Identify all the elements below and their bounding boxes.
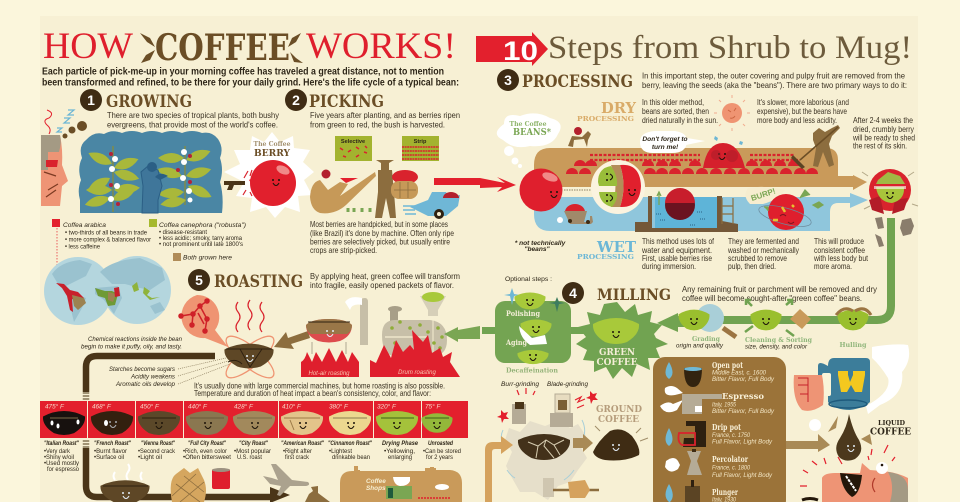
label: american roast: first crack [285, 454, 310, 461]
label: italian roast: •Shiny w/oil [44, 454, 74, 461]
starburst: green coffee: COFFEE [596, 357, 638, 368]
strip picking sample: Strip [414, 139, 427, 145]
band: wet processing arrow [534, 193, 868, 231]
thought bubble: the coffee beans: The Coffee [510, 120, 546, 128]
step 3 heading: processing: 3 [504, 72, 512, 88]
label: italian roast: "Italian Roast" [44, 440, 79, 447]
panel: coffee shops skyline: Shops [366, 485, 386, 492]
legend: coffea arabica: • more complex & balanced flavor [65, 236, 152, 244]
step 1 heading: growing: GROWING [106, 92, 192, 112]
picking notes: crops are strip-picked. [310, 245, 377, 255]
green arrow into drum [444, 326, 480, 342]
label: ground coffee: COFFEE [598, 414, 639, 425]
arrow: brewing to liquid coffee [786, 434, 830, 452]
band: dry processing arrow [534, 148, 867, 190]
speech bubble: don't forget to turn me [640, 131, 705, 153]
label: cinnamon roast [328, 440, 372, 461]
method: drip pot: France, c. 1750 [712, 432, 750, 439]
method: plunger: Plunger [712, 487, 739, 497]
after drying note: will be ready to shed [852, 132, 915, 142]
legend: both grown here [173, 253, 232, 262]
split berry with green bean [862, 169, 918, 247]
label: italian roast: •Very dark [44, 448, 71, 455]
roast: italian 475F: 475° F [45, 402, 65, 410]
label: city roast [234, 440, 272, 461]
picking notes [310, 219, 454, 255]
legend: coffea arabica: • less caffeine [65, 244, 100, 250]
icon: the coffee berry starburst [224, 132, 314, 218]
roast: italian 475F [40, 401, 87, 438]
wet step text 2: They are fermented and [728, 236, 799, 246]
bean: grading: Grading [692, 335, 720, 343]
arrow: grinder to ground coffee [573, 434, 593, 452]
growing description: There are two species of tropical plants, both bushy [107, 110, 280, 120]
selective picking sample: Selective [341, 139, 365, 145]
roast: cinnamon 380F [326, 401, 373, 438]
legend: coffea canephora: Coffea canephora ("robusta") [159, 222, 246, 229]
wet step text 1 [641, 236, 715, 271]
footnote: not technically beans: * not technically [515, 240, 566, 247]
arrow: roasted bean into grinder [485, 436, 513, 502]
step 4 heading: milling [562, 282, 671, 304]
steam lines [236, 300, 264, 332]
label: vienna roast: "Vienna Roast" [141, 440, 175, 447]
label: drying phase: Drying Phase [382, 440, 419, 447]
grinding labels: Burr-grinding [501, 381, 539, 388]
method: percolator: France, c. 1800 [712, 464, 750, 472]
picking description [310, 110, 460, 130]
label: liquid coffee: COFFEE [870, 426, 911, 438]
chemical reactions note: begin to make it puffy, oily, and tasty. [81, 344, 182, 350]
roast: american 410F [279, 401, 326, 438]
roasting effects list [109, 358, 230, 388]
label: french roast: •Burnt flavor [94, 448, 128, 455]
thought bubble: the coffee beans [497, 113, 561, 168]
step 5 heading: roasting: ROASTING [214, 272, 303, 292]
roast: city 428F [231, 401, 278, 438]
roasting note: It's usually done with large commercial machines, but home roasting is also possible. [194, 380, 445, 390]
label: french roast [94, 440, 131, 461]
label: city roast: U.S. roast [237, 454, 262, 461]
hot-air roaster [301, 297, 368, 377]
method: percolator [665, 449, 773, 479]
icon: liquid coffee drop [809, 414, 872, 461]
roast: drying 320F: 320° F [377, 402, 397, 410]
label: ground coffee [596, 404, 642, 425]
panel: coffee shops skyline: Coffee [366, 478, 386, 485]
bean: hulling [836, 309, 871, 349]
wet step text 2 [727, 236, 800, 271]
label: city roast: "City Roast" [239, 440, 268, 447]
label: unroasted: •Can be stored [423, 448, 461, 455]
icon: sleeping face [41, 110, 87, 206]
burp bubble: BURP! [750, 187, 777, 203]
badge: 10 arrow [476, 32, 548, 66]
bean: grading [676, 304, 736, 350]
roasting bean with orbits [221, 330, 279, 384]
method: espresso: Espresso [722, 391, 765, 401]
label: drying phase: enlarging [388, 454, 412, 461]
method: open pot: Open pot [712, 360, 743, 370]
split berry cross-section [591, 160, 645, 214]
icon: michigan mug and hand [794, 344, 909, 414]
dry processing text: beans are sorted, then [642, 106, 709, 116]
icon: picking machine [348, 192, 460, 219]
legend: coffea canephora: • not prominent until late 1800's [159, 241, 244, 248]
wet step text 1: during immersion. [642, 261, 696, 271]
starburst: green coffee: GREEN [599, 347, 635, 358]
wet step text 2: scrubbed to remove [728, 253, 787, 263]
label: american roast [281, 440, 324, 461]
grinding labels [501, 381, 588, 388]
method: drip pot: Drip pot [712, 422, 741, 432]
processing description: berry, leaving the seeds (aka the "beans"). There are two primary ways to do it: [642, 80, 907, 90]
wet step text 3 [813, 236, 869, 271]
legend: both grown here: Both grown here [183, 254, 232, 262]
title: How Coffee Works: HOW [43, 26, 133, 67]
dry processing notes: more body and less acidity. [757, 115, 837, 125]
label: liquid coffee [870, 419, 911, 438]
title: How Coffee Works: WORKS! [306, 26, 456, 67]
big red berry [520, 168, 594, 212]
icon: sun [714, 95, 750, 131]
legend: coffea arabica: • two-thirds of all beans in trade [65, 230, 147, 236]
speech bubble: don't forget to turn me: Don't forget to [642, 136, 688, 143]
label: city roast: •Most popular [234, 448, 272, 455]
label: wet processing: PROCESSING [577, 253, 635, 261]
roasting note: Temperature and duration of heat impact a bean's consistency, color, and flavor: [194, 388, 431, 398]
label: cinnamon roast: •Lightest [329, 448, 352, 455]
panel: coffee shops skyline [340, 466, 462, 502]
wet processing tank [635, 188, 738, 232]
milling description: coffee will become sought-after "green coffee" beans. [682, 293, 862, 303]
icon: farmer with basket [375, 160, 418, 218]
wet step text 3: with less body but [813, 253, 869, 263]
map: coffee growing regions [44, 256, 171, 325]
optional steps panel: Polishing [506, 309, 540, 318]
drying rows of red berries [566, 136, 818, 174]
roasting effects list: Acidity weakens [130, 374, 176, 380]
method: espresso: Italy, 1955 [712, 402, 736, 408]
wet step text 2: washed or mechanically [727, 245, 800, 255]
badge: 10 arrow: 10 [503, 36, 538, 66]
wet step text 1: First, usable berries rise [642, 253, 712, 263]
title: How Coffee Works: COFFEE [155, 27, 290, 69]
molecule bubble [179, 295, 228, 347]
method: drip pot [666, 421, 773, 447]
label: french roast: •Surface oil [94, 454, 124, 461]
dry processing text: In this older method, [642, 97, 704, 107]
roast: vienna 450F [136, 401, 183, 438]
roasting description: into fragile, easily opened packets of flavor. [310, 280, 454, 290]
label: unroasted [423, 440, 461, 461]
red flow arrow: berry to processing [434, 177, 516, 192]
label: cinnamon roast: drinkable bean [332, 454, 370, 461]
label: liquid coffee: LIQUID [878, 419, 905, 427]
icon: farmer raking [791, 125, 840, 169]
method: plunger [666, 480, 739, 502]
roast: unroasted 75F [421, 401, 468, 438]
roasting description [310, 271, 460, 290]
roast: cinnamon 380F: 380° F [329, 402, 349, 410]
label: full city roast [183, 440, 231, 461]
chemical reactions note [81, 336, 182, 350]
roasting description: By applying heat, green coffee will transform [310, 271, 460, 281]
method: espresso [660, 386, 775, 415]
method: drip pot: Full Flavor, Light Body [712, 438, 773, 446]
starburst: green coffee [576, 302, 668, 379]
after drying note: the rest of its skin. [853, 140, 907, 150]
milling description [682, 284, 878, 303]
icon: the coffee berry starburst: The Coffee [254, 140, 290, 148]
step 5 heading: roasting [188, 269, 303, 292]
icon: truck of berries [557, 204, 593, 224]
roast: vienna 450F: 450° F [140, 402, 160, 410]
dry processing notes: It's slower, more laborious (and [757, 97, 849, 107]
bottom roasted bean with steam [100, 464, 150, 502]
growing description: evergreens, that provide most of the world's coffee. [107, 120, 278, 130]
picking notes: Most berries are handpicked, but in some places [310, 219, 448, 229]
fermenting berry [757, 190, 823, 231]
step 2 heading: picking: PICKING [309, 92, 384, 112]
chemical reactions note: Chemical reactions inside the bean [88, 336, 182, 343]
icon: airplane [263, 464, 309, 496]
label: full city roast: •Often bittersweet [183, 454, 231, 461]
bean: cleaning and sorting: Cleaning & Sorting [745, 336, 812, 344]
roast: unroasted 75F: 75° F [425, 402, 441, 410]
step 1 heading: growing: 1 [87, 92, 95, 108]
bean: cleaning and sorting: size, density, and color [745, 344, 808, 350]
dry processing text [642, 97, 718, 125]
label: ground coffee: GROUND [596, 404, 642, 415]
icon: the coffee berry starburst: BERRY [254, 149, 291, 159]
method: espresso: Bitter Flavor, Full Body [712, 408, 775, 415]
icon: coffee sack [171, 468, 206, 502]
label: unroasted: for 2 years [426, 454, 454, 461]
step 4 heading: milling: 4 [569, 285, 577, 301]
roasting note [194, 380, 445, 398]
roast: american 410F: 410° F [282, 402, 302, 410]
footnote: not technically beans [515, 240, 566, 253]
after drying note: After 2-4 weeks the [853, 115, 913, 125]
arrow: to bean [274, 331, 310, 349]
label: vienna roast [138, 440, 176, 461]
processing description: In this important step, the outer covering and pulpy fruit are removed from the [642, 70, 905, 80]
after drying note: dried, crumbly berry [853, 124, 915, 134]
grinding labels: Blade-grinding [547, 381, 588, 388]
wet step text 3: This will produce [814, 236, 864, 246]
dry processing text: dried naturally in the sun. [642, 115, 718, 125]
label: cinnamon roast: "Cinnamon Roast" [328, 440, 372, 447]
method: percolator: Percolator [712, 454, 749, 464]
label: italian roast: for espresso [47, 466, 79, 473]
dry processing notes [757, 97, 849, 125]
picking notes: berries are selectively picked, but usually entire [310, 236, 450, 246]
label: wet processing: WET [596, 238, 637, 256]
method: open pot: Middle East, c. 1600 [712, 370, 766, 376]
label: dry processing: PROCESSING [577, 115, 635, 123]
roast: french 468F: 468° F [92, 402, 112, 410]
label: dry processing [577, 99, 636, 123]
bean: cleaning and sorting [745, 300, 812, 350]
roasting effects list: Aromatic oils develop [115, 381, 175, 388]
optional steps panel: Decaffeination [506, 366, 558, 374]
green flow pipe: milling [482, 218, 891, 334]
processing description [642, 70, 907, 90]
footnote: not technically beans: "beans" [524, 246, 551, 253]
icon: happy drinker face [800, 445, 908, 502]
legend: coffea canephora: • disease-resistant [159, 229, 207, 236]
wet step text 1: This method uses lots of [642, 236, 715, 246]
roast: french 468F [88, 401, 135, 438]
milling description: Any remaining fruit or parchment will be removed and dry [682, 284, 878, 294]
label: drying phase [382, 440, 419, 461]
method: open pot [666, 360, 775, 387]
label: french roast: "French Roast" [94, 440, 131, 447]
step 5 heading: roasting: 5 [195, 272, 203, 288]
panel: brewing methods [653, 357, 786, 502]
label: full city roast: •Rich, even color [183, 448, 228, 455]
label: full city roast: "Full City Roast" [188, 440, 226, 447]
icon: horse rider [567, 127, 591, 153]
optional steps panel [495, 276, 571, 374]
picking notes: (like Brazil) it's done by machine. Often only ripe [310, 228, 454, 238]
bean: grading: origin and quality [676, 342, 724, 350]
strip picking sample [402, 136, 439, 161]
title: How Coffee Works [43, 26, 456, 69]
step 2 heading: picking [285, 89, 384, 112]
drum roaster: Drum roasting [398, 370, 436, 376]
heading: steps from shrub to mug: Steps from Shrub to Mug! [548, 30, 912, 66]
label: italian roast: •Used mostly [44, 460, 80, 467]
label: vienna roast: •Second crack [138, 448, 176, 455]
growing description [107, 110, 280, 130]
hot-air roaster: Hot-air roasting [308, 371, 350, 377]
icon: seated person [305, 486, 330, 502]
label: american roast: "American Roast" [281, 440, 324, 447]
burp bubble [745, 187, 785, 204]
speech bubble: don't forget to turn me: turn me! [652, 144, 679, 151]
roast labels [44, 440, 461, 473]
bean: hulling: Hulling [840, 341, 867, 349]
legend: coffea canephora [149, 219, 246, 248]
intro paragraph: Each particle of pick-me-up in your morning coffee has traveled a great distance, not to mention [42, 66, 444, 78]
wet step text 1: water and equipment. [641, 245, 712, 255]
step 4 heading: milling: MILLING [597, 285, 671, 304]
step 3 heading: processing: PROCESSING [522, 72, 633, 92]
label: vienna roast: •Light oil [138, 454, 163, 461]
picking description: Five years after planting, and as berries ripen [310, 110, 460, 120]
picking description: from green to red, the bush is harvested. [310, 120, 445, 130]
legend: coffea arabica [52, 219, 152, 283]
step 3 heading: processing [497, 69, 633, 92]
roast: city 428F: 428° F [234, 402, 254, 410]
drum roaster [370, 292, 460, 377]
roast: drying 320F [374, 401, 421, 438]
thought bubble: the coffee beans: BEANS* [513, 128, 551, 138]
roast: full city 440F: 440° F [188, 402, 208, 410]
dry processing notes: expensive), but the beans have [757, 106, 847, 116]
label: unroasted: Unroasted [428, 440, 453, 447]
step 2 heading: picking: 2 [292, 92, 300, 108]
label: american roast: •Right after [283, 448, 313, 455]
after drying note [852, 115, 915, 150]
icon: coffee can [212, 468, 230, 489]
label: wet processing [577, 238, 637, 261]
label: italian roast [44, 440, 80, 473]
label: dry processing: DRY [601, 99, 636, 117]
roast scale: temperature boxes [40, 401, 468, 438]
roasting effects list: Starches become sugars [109, 366, 176, 373]
step 1 heading: growing [80, 89, 192, 112]
method: percolator: Full Flavor, Light Body [712, 472, 773, 479]
icon: picking hand [310, 170, 376, 213]
legend: coffea arabica: Coffea arabica [63, 222, 106, 229]
wet step text 3: consistent coffee [814, 245, 865, 255]
wet step text 2: pulp, then dried. [728, 261, 776, 271]
method: open pot: Bitter Flavor, Full Body [712, 376, 775, 383]
label: drying phase: •Yellowing, [384, 448, 415, 455]
selective picking sample [335, 136, 372, 161]
panel: coffee plants on blue cloud [79, 131, 223, 213]
intro paragraph: been transformed and refined, to be there for your daily grind. Here's the life cycle of a typical bean: [42, 78, 459, 88]
optional steps panel: Optional steps : [505, 276, 552, 283]
roast: full city 440F [184, 401, 231, 438]
optional steps panel: Aging [505, 338, 527, 347]
ground coffee pile [593, 426, 648, 460]
icon: grinders over cracked bean [497, 388, 599, 500]
wet step text 3: more aroma. [814, 261, 852, 271]
intro paragraph [42, 66, 459, 88]
legend: coffea canephora: • less acidic; smoky, tarry aroma [159, 235, 242, 242]
roast flow line [86, 356, 290, 502]
